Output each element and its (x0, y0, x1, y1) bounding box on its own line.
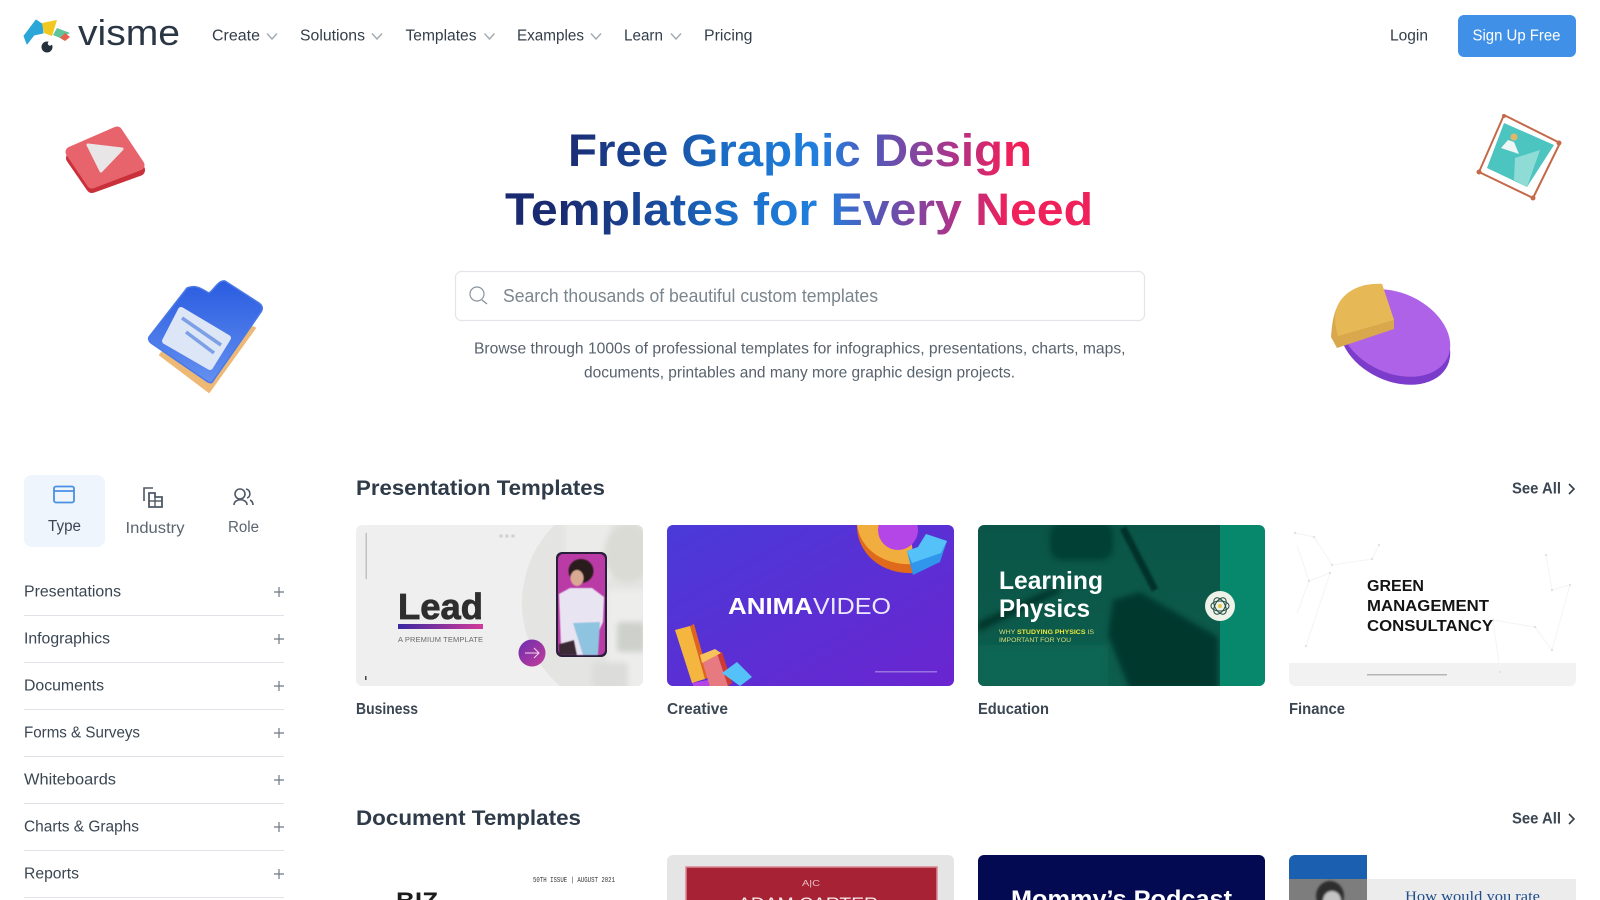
logo: visme (78, 12, 180, 53)
sidebar category list (24, 584, 284, 898)
link: See All documents: See All (1512, 810, 1561, 828)
intro text: documents, printables and many more graphic design projects. (584, 364, 1015, 382)
document thumbnail: Biz magazine: 50TH ISSUE | AUGUST 2021 (533, 877, 615, 885)
thumbnail: Lead: Lead (398, 586, 483, 627)
intro text (474, 340, 1126, 382)
nav: Learn: Learn (624, 28, 663, 44)
item: Forms & Surveys: Forms & Surveys (24, 724, 140, 742)
item: Presentations (24, 584, 284, 600)
label: Education: Education (978, 701, 1049, 718)
tab: Type: Type (48, 518, 81, 535)
icon: picture frame (1476, 114, 1562, 200)
icon: 3D pie chart (1326, 272, 1464, 402)
template card: Creative (667, 510, 954, 718)
title: Free Graphic Design (568, 125, 1032, 176)
label: Business: Business (356, 701, 418, 718)
item: Whiteboards (24, 772, 284, 788)
tab: Role (228, 489, 259, 536)
template card: Finance (1289, 525, 1576, 718)
tab: Industry: Industry (126, 520, 185, 537)
nav: Pricing: Pricing (704, 28, 752, 44)
sign up button: Sign Up Free (1472, 28, 1560, 44)
thumbnail: Learning Physics: Learning (999, 567, 1103, 595)
label: Creative: Creative (667, 701, 728, 718)
nav: Solutions: Solutions (300, 28, 365, 44)
icon: 3D play button (71, 132, 139, 187)
logo (24, 12, 180, 53)
title: Templates for Every Need (505, 184, 1093, 235)
thumbnail: Lead: A PREMIUM TEMPLATE (398, 635, 483, 644)
document thumbnail: Mommy's Podcast (978, 855, 1265, 900)
heading: Presentation Templates: Presentation Templates (356, 477, 605, 500)
thumbnail: Learning Physics: WHY STUDYING PHYSICS IS (999, 629, 1095, 636)
document thumbnail: Adam Carter (667, 855, 954, 900)
document thumbnail: survey (1289, 855, 1576, 900)
item: Documents: Documents (24, 678, 104, 694)
item: Reports: Reports (24, 866, 79, 882)
item: Infographics (24, 630, 284, 648)
item: Reports (24, 866, 284, 882)
tab: Role: Role (228, 519, 259, 536)
thumbnail: Green Management Consultancy: MANAGEMENT (1367, 598, 1489, 615)
heading: Document Templates: Document Templates (356, 807, 581, 830)
item: Charts & Graphs (24, 818, 284, 836)
link: See All presentations: See All (1512, 480, 1561, 498)
template card: Education (978, 522, 1265, 718)
thumbnail: Learning Physics: Physics (999, 595, 1090, 623)
document thumbnail: Biz magazine (396, 877, 615, 900)
intro text: Browse through 1000s of professional templates for infographics, presentations, charts, maps, (474, 340, 1126, 358)
tab: Type (24, 475, 105, 547)
nav: Login: Login (1390, 28, 1428, 44)
sidebar filter tabs (24, 475, 259, 547)
item: Infographics: Infographics (24, 630, 110, 648)
thumbnail: Green Management Consultancy: GREEN (1367, 578, 1424, 595)
nav: Learn (624, 28, 681, 44)
nav: Examples: Examples (517, 28, 584, 44)
item: Whiteboards: Whiteboards (24, 772, 116, 788)
label: Finance: Finance (1289, 701, 1345, 718)
header navigation (24, 12, 1576, 57)
thumbnail: Anima Video: ANIMA (728, 593, 813, 619)
search box (456, 272, 1144, 320)
nav: Templates: Templates (406, 28, 477, 44)
thumbnail: Anima Video: VIDEO (813, 593, 891, 619)
template card: Business (356, 525, 643, 714)
nav: Create: Create (212, 28, 260, 44)
search box: Search thousands of beautiful custom templates (503, 286, 878, 306)
item: Presentations: Presentations (24, 584, 121, 600)
thumbnail: Learning Physics: IMPORTANT FOR YOU (999, 637, 1071, 644)
sign up button (1458, 15, 1576, 57)
thumbnail: Lead (356, 525, 643, 686)
thumbnail: Green Management Consultancy (1289, 525, 1576, 686)
thumbnail: Anima Video (667, 510, 954, 687)
title (505, 125, 1093, 235)
thumbnail: Learning Physics (978, 522, 1265, 690)
tab: Industry (126, 488, 185, 537)
icon: 3D document folder (149, 281, 262, 392)
item: Forms & Surveys (24, 724, 284, 742)
thumbnail: Green Management Consultancy: CONSULTANCY (1367, 618, 1493, 635)
item: Charts & Graphs: Charts & Graphs (24, 818, 139, 836)
item: Documents (24, 678, 284, 694)
document thumbnail: Adam Carter: A|C (802, 879, 820, 888)
